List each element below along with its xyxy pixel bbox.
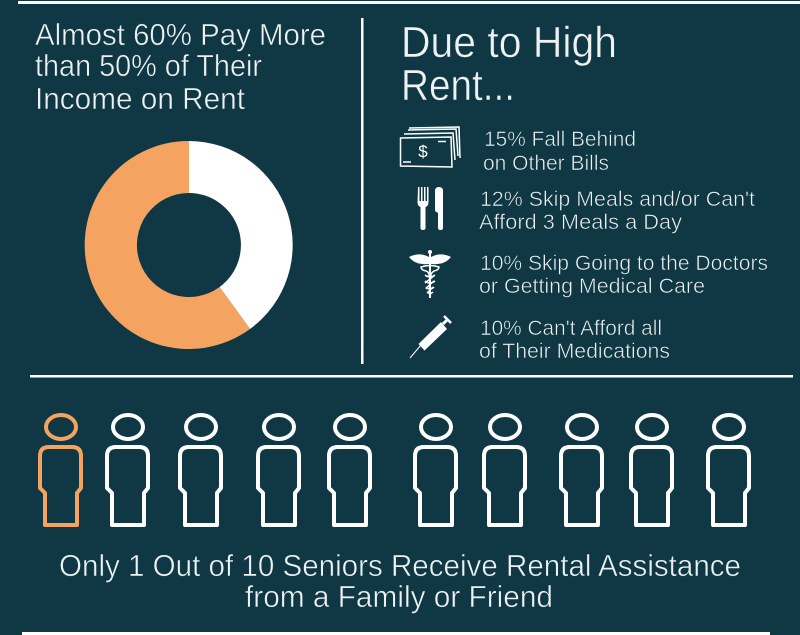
text: 15% fall behind: 15% Fall Behind: [484, 128, 636, 151]
heading: almost 60% pay more: than 50% of Their: [35, 48, 262, 83]
icon: syringe: [410, 316, 451, 358]
icon: caduceus: [409, 250, 451, 298]
person 3: [180, 415, 221, 525]
person 6: [415, 415, 456, 525]
text: 12% skip meals: [479, 188, 755, 234]
text: 12% skip meals: Afford 3 Meals a Day: [479, 211, 683, 234]
person 2: [107, 415, 148, 525]
icon: money: [400, 127, 460, 167]
text: 12% skip meals: 12% Skip Meals and/or Can't: [480, 188, 755, 211]
text: 10% can't afford: of Their Medications: [479, 340, 670, 363]
person 5: [329, 415, 370, 525]
text: 10% skip going to the doctors: [479, 252, 768, 298]
text: 15% fall behind: on Other Bills: [483, 152, 609, 175]
heading: almost 60% pay more: Almost 60% Pay More: [35, 17, 326, 52]
person: highlighted orange: [40, 415, 81, 525]
text: 10% skip going to the doctors: or Getting Medical Care: [479, 275, 705, 298]
icon: fork and knife: [418, 187, 443, 230]
text: 10% can't afford: [479, 317, 670, 363]
text: 10% can't afford: 10% Can't Afford all: [480, 317, 662, 340]
person 8: [561, 415, 602, 525]
heading: due to high rent: Rent...: [401, 61, 515, 110]
text: 15% fall behind: [483, 128, 636, 175]
text: 10% skip going to the doctors: 10% Skip Going to the Doctors: [480, 252, 768, 275]
person 10: [708, 415, 749, 525]
icon: money: $: [418, 142, 428, 161]
person 7: [484, 415, 525, 525]
donut chart: [85, 141, 293, 349]
heading: due to high rent: Due to High: [401, 18, 617, 67]
heading: almost 60% pay more: Income on Rent: [35, 81, 245, 116]
caption: only 1 out of 10 seniors: from a Family or Friend: [245, 579, 553, 614]
caption: only 1 out of 10 seniors: [59, 548, 741, 614]
heading: due to high rent: [401, 18, 617, 110]
person icon row: [40, 415, 749, 525]
caption: only 1 out of 10 seniors: Only 1 Out of 10 Seniors Receive Rental Assistance: [59, 548, 741, 583]
heading: almost 60% pay more: [35, 17, 326, 116]
person 9: [631, 415, 672, 525]
person 4: [258, 415, 299, 525]
